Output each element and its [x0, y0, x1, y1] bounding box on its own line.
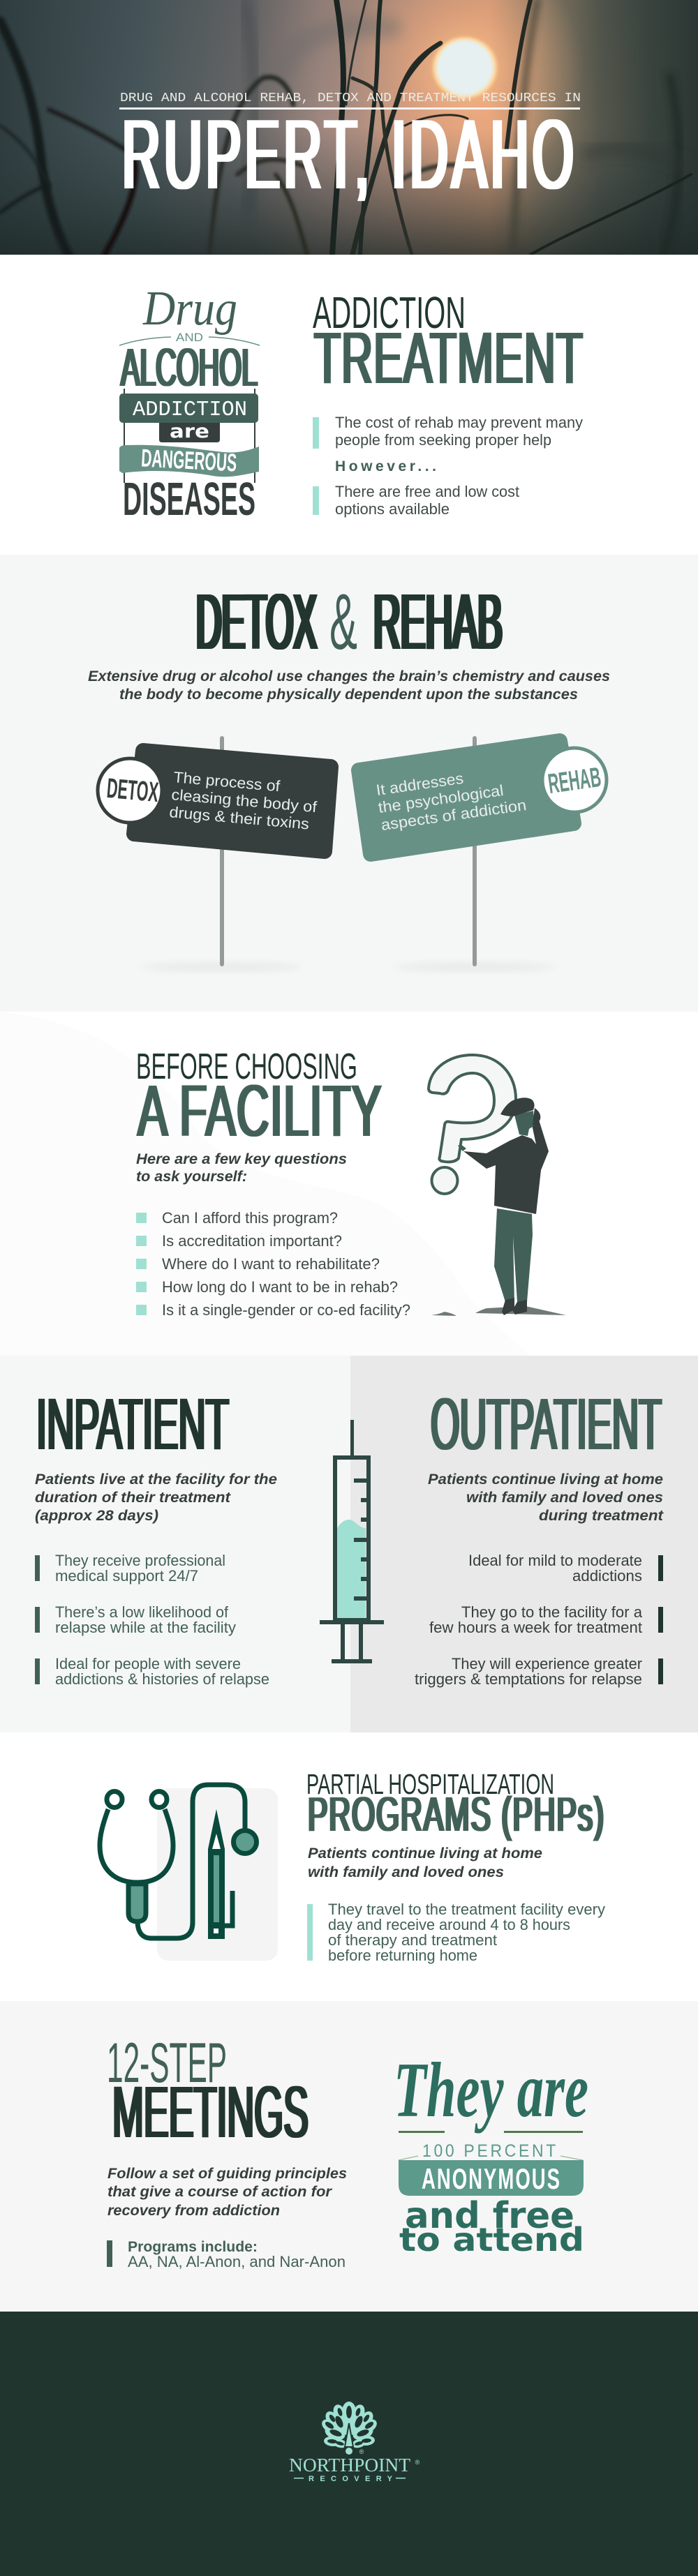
illustration: person with question mark [429, 1055, 566, 1316]
outpatient point 1: addictions [572, 1567, 642, 1585]
panel: inpatient [0, 1356, 350, 1732]
heading: partial hospitalization programs: PARTIAL HOSPITALIZATION [306, 1768, 554, 1800]
text block: php details: of therapy and treatment [328, 1931, 497, 1949]
heading: detox and rehab: & [329, 578, 357, 666]
heading: addiction treatment [313, 287, 584, 399]
badge: they are 100 percent anonymous and free to attend: and free [405, 2195, 574, 2237]
icon: peacock leaves [320, 2402, 379, 2455]
description: that give a course of action for [107, 2183, 333, 2200]
question list: Is accreditation important? [162, 1232, 342, 1250]
text: small registered mark: ® [359, 2448, 364, 2455]
outpatient point 3 [415, 1655, 663, 1688]
question list: Is it a single-gender or co-ed facility? [162, 1301, 410, 1319]
signpost: rehab: It addresses [375, 770, 464, 799]
panel: header photo [0, 0, 698, 255]
description: with family and loved ones [308, 1864, 504, 1880]
badge: drug and alcohol addiction are dangerous diseases: Drug [142, 282, 237, 336]
badge: drug and alcohol addiction are dangerous diseases: ADDICTION [133, 398, 247, 422]
inpatient point 3: Ideal for people with severe [55, 1655, 241, 1672]
inpatient point 2 [35, 1603, 236, 1636]
description [107, 2165, 347, 2219]
question list: Can I afford this program? [162, 1209, 338, 1227]
outpatient description: with family and loved ones [466, 1489, 663, 1506]
signpost: rehab: the psychological [377, 781, 505, 816]
panel: addiction treatment [0, 255, 698, 555]
text block: free options: options available [335, 500, 450, 518]
heading: before choosing a facility [136, 1047, 383, 1152]
badge: drug and alcohol addiction are dangerous diseases: AND [176, 331, 203, 344]
header rule [119, 107, 580, 110]
text: recovery: RECOVERY [309, 2475, 393, 2483]
heading: detox and rehab: DETOX [196, 578, 317, 666]
panel: detox and rehab [0, 555, 698, 1012]
outpatient description: Patients continue living at home [428, 1471, 663, 1488]
outpatient description [428, 1471, 664, 1524]
text block: php details: day and receive around 4 to 8 hours [328, 1916, 570, 1933]
question list [136, 1209, 410, 1319]
header subtitle: DRUG AND ALCOHOL REHAB, DETOX AND TREATMENT RESOURCES IN [120, 91, 581, 105]
signpost: detox: The process of [173, 768, 281, 795]
outpatient point 2: They go to the facility for a [461, 1603, 643, 1621]
outpatient point 1 [468, 1552, 663, 1585]
intro text: to ask yourself: [136, 1168, 247, 1185]
heading: 12-step meetings [107, 2032, 309, 2153]
signpost: rehab: aspects of addiction [380, 796, 528, 834]
outpatient point 2 [429, 1603, 663, 1636]
panel: outpatient [350, 1356, 698, 1732]
outpatient description: during treatment [539, 1507, 664, 1524]
outpatient point 1: Ideal for mild to moderate [468, 1552, 642, 1569]
text: northpoint: NORTHPOINT [289, 2455, 411, 2476]
panel: 12-step meetings [0, 2001, 698, 2312]
inpatient point 3 [35, 1655, 269, 1688]
text block: php details: They travel to the treatment facility every [328, 1901, 605, 1918]
signpost: detox: DETOX [105, 773, 160, 808]
text block: php details [307, 1901, 605, 1964]
signpost: rehab [359, 736, 607, 966]
signpost: detox [98, 736, 331, 966]
text block: cost of rehab: The cost of rehab may prevent many [335, 414, 583, 431]
inpatient description [35, 1471, 277, 1524]
programs include: AA, NA, Al-Anon, and Nar-Anon [128, 2253, 346, 2270]
panel: footer [0, 2312, 698, 2576]
description: recovery from addiction [107, 2202, 280, 2219]
text: registered mark: ® [415, 2459, 420, 2466]
badge: they are 100 percent anonymous and free to attend: 100 PERCENT [422, 2141, 558, 2161]
description: Follow a set of guiding principles [107, 2165, 347, 2182]
text block: cost of rehab [313, 414, 583, 449]
question list: Where do I want to rehabilitate? [162, 1255, 380, 1273]
text block: free options [313, 483, 519, 518]
badge: they are 100 percent anonymous and free to attend: They are [394, 2047, 588, 2134]
badge: they are 100 percent anonymous and free to attend: to attend [399, 2221, 584, 2259]
badge: drug and alcohol addiction are dangerous diseases [119, 282, 260, 525]
signpost: rehab: REHAB [546, 762, 603, 800]
heading: 12-step meetings: 12-STEP [107, 2032, 227, 2095]
illustration: stethoscope and pen [100, 1785, 278, 1961]
badge: drug and alcohol addiction are dangerous diseases: DISEASES [123, 473, 255, 525]
outpatient point 3: They will experience greater [452, 1655, 642, 1672]
heading: before choosing a facility: BEFORE CHOOSING [136, 1047, 357, 1087]
panel: partial hospitalization programs [0, 1732, 698, 2001]
programs include [107, 2239, 346, 2270]
description: Patients continue living at home [308, 1845, 542, 1862]
intro text: Here are a few key questions [136, 1151, 347, 1167]
outpatient point 2: few hours a week for treatment [429, 1619, 642, 1636]
inpatient point 2: There’s a low likelihood of [55, 1603, 229, 1621]
signpost: detox: drugs & their toxins [169, 803, 310, 832]
signpost: detox: cleasing the body of [171, 786, 318, 816]
badge: they are 100 percent anonymous and free to attend [394, 2047, 588, 2259]
panel: before choosing a facility [0, 1012, 698, 1356]
inpatient description: (approx 28 days) [35, 1507, 158, 1524]
inpatient point 1: medical support 24/7 [55, 1567, 198, 1585]
badge: drug and alcohol addiction are dangerous diseases: DANGEROUS [140, 443, 237, 477]
panel: detox and rehab: REHAB [373, 578, 503, 666]
illustration: syringe [320, 1420, 384, 1663]
badge: drug and alcohol addiction are dangerous diseases: are [170, 421, 209, 442]
inpatient point 2: relapse while at the facility [55, 1619, 236, 1636]
intro text: the body to become physically dependent upon the substances [119, 686, 578, 703]
heading: partial hospitalization programs [306, 1768, 605, 1841]
question list: How long do I want to be in rehab? [162, 1278, 398, 1296]
text block: php details: before returning home [328, 1947, 477, 1964]
inpatient point 1: They receive professional [55, 1552, 225, 1569]
logo: northpoint recovery [289, 2402, 420, 2483]
outpatient point 3: triggers & temptations for relapse [415, 1670, 642, 1688]
heading: 12-step meetings: MEETINGS [112, 2072, 309, 2153]
inpatient description: Patients live at the facility for the [35, 1471, 277, 1488]
badge: they are 100 percent anonymous and free to attend: ANONYMOUS [422, 2162, 561, 2195]
text block: cost of rehab: people from seeking proper help [335, 431, 551, 449]
programs include: Programs include: [128, 2239, 258, 2255]
description [308, 1845, 542, 1880]
inpatient point 1 [35, 1552, 225, 1585]
heading: addiction treatment: ADDICTION [313, 287, 466, 338]
heading: before choosing a facility: A FACILITY [138, 1070, 383, 1152]
heading: inpatient: INPATIENT [36, 1384, 229, 1465]
inpatient description: duration of their treatment [35, 1489, 231, 1506]
text: however: However... [335, 458, 436, 474]
text block: free options: There are free and low cost [335, 483, 519, 500]
inpatient point 3: addictions & histories of relapse [55, 1670, 269, 1688]
intro text [136, 1151, 347, 1185]
signpost shadows [142, 962, 555, 972]
intro text [88, 668, 610, 703]
intro text: Extensive drug or alcohol use changes the brain’s chemistry and causes [88, 668, 610, 684]
badge: drug and alcohol addiction are dangerous diseases: ALCOHOL [121, 338, 258, 398]
